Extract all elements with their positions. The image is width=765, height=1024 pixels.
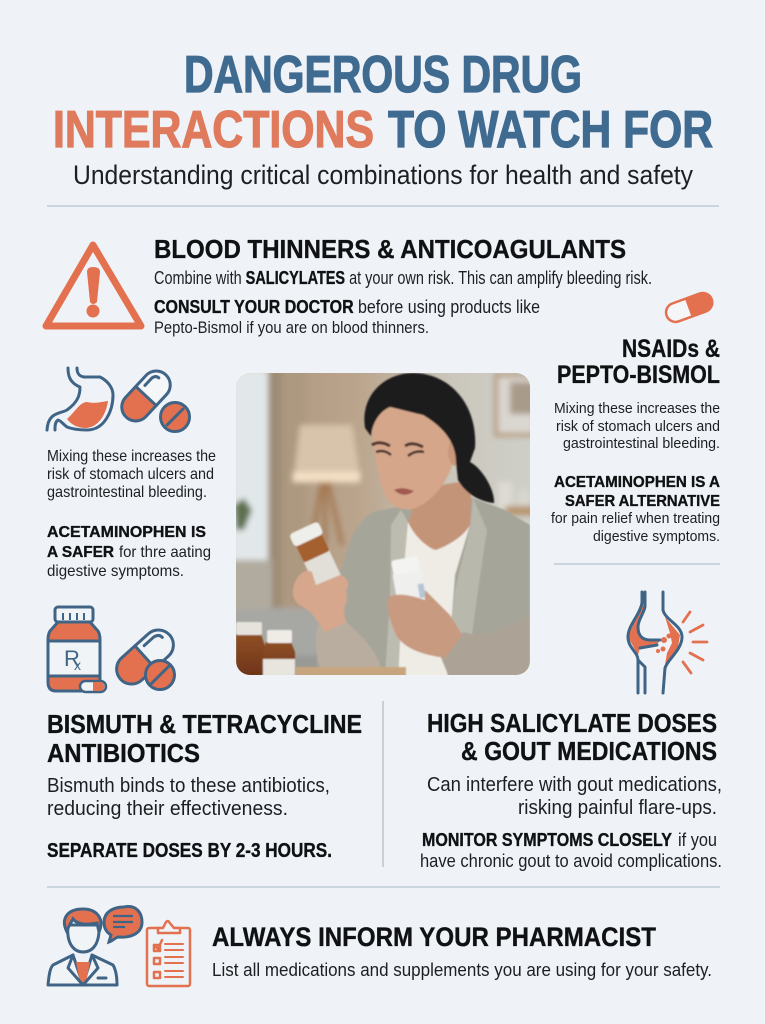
- heading: NSAIDs: NSAIDs &: [622, 335, 720, 363]
- icon: prescription bottle: x: [74, 657, 81, 673]
- icon: pill top right: [663, 289, 716, 326]
- panel: high salicylate doses: & GOUT MEDICATIONS: [461, 736, 717, 766]
- icon: warning triangle: [46, 245, 141, 326]
- text: right acetaminophen note: [551, 474, 720, 545]
- heading: bismuth: BISMUTH & TETRACYCLINE: [47, 709, 362, 739]
- text: left acetaminophen note: ACETAMINOPHEN IS: [47, 524, 206, 541]
- text: left acetaminophen note: [47, 524, 211, 580]
- heading: blood thinners: BLOOD THINNERS & ANTICOAGULANTS: [154, 234, 626, 264]
- icon: clipboard checklist: [147, 921, 190, 986]
- photo: woman reading medication bottles: [236, 373, 530, 675]
- text: left acetaminophen note: A SAFER: [47, 544, 114, 561]
- text: right stomach warning: Mixing these increases the: [554, 400, 720, 417]
- text: right acetaminophen note: ACETAMINOPHEN IS A: [554, 474, 720, 491]
- footer heading: ALWAYS INFORM YOUR PHARMACIST: [212, 922, 656, 952]
- text: monitor symptoms: MONITOR SYMPTOMS CLOSELY: [422, 830, 672, 850]
- icon: stomach: [47, 368, 113, 430]
- text: consult doctor: CONSULT YOUR DOCTOR before using products like: [154, 297, 540, 317]
- text: right acetaminophen note: SAFER ALTERNATIVE: [565, 493, 720, 510]
- panel: bismuth and tetracycline: reducing their effectiveness.: [47, 798, 288, 820]
- text: left stomach warning: risk of stomach ulcers and: [47, 466, 214, 483]
- panel: high salicylate doses: if you: [678, 830, 717, 850]
- text: left stomach warning: gastrointestinal bleeding.: [47, 484, 207, 501]
- text: salicylates warning: Combine with SALICYLATES at your own risk. This can amplify bleeding risk.: [154, 268, 652, 288]
- text: right stomach warning: risk of stomach ulcers and: [556, 418, 720, 435]
- icon: speech bubble: [104, 906, 142, 942]
- text: separate doses: SEPARATE DOSES BY 2-3 HOURS.: [47, 840, 332, 862]
- bottles on table: [236, 622, 295, 676]
- heading: NSAIDs: PEPTO-BISMOL: [557, 361, 720, 389]
- text: right acetaminophen note: digestive symptoms.: [593, 528, 720, 545]
- panel: high salicylate doses: [420, 708, 722, 871]
- icon: pharmacist: [48, 909, 117, 985]
- text: can interfere: Can interfere with gout medications,: [427, 774, 722, 796]
- text: left acetaminophen note: for thre aating: [119, 544, 211, 561]
- panel: blood thinners: [154, 234, 652, 337]
- icon: prescription bottle: R: [64, 646, 80, 671]
- panel: bismuth and tetracycline: [47, 709, 362, 862]
- icon: capsule and tablet bottom: [110, 624, 180, 690]
- woman figure: [289, 373, 530, 680]
- heading: salicylate: HIGH SALICYLATE DOSES: [427, 708, 717, 738]
- text: pepto note: Pepto-Bismol if you are on blood thinners.: [154, 318, 429, 337]
- footer text: List all medications and supplements you are using for your safety.: [212, 960, 712, 980]
- text: right acetaminophen note: for pain relief when treating: [551, 510, 720, 527]
- panel: high salicylate doses: risking painful flare-ups.: [518, 797, 717, 819]
- title: [53, 46, 713, 159]
- heading: NSAIDs: [557, 335, 720, 389]
- text: left stomach warning: Mixing these increases the: [47, 448, 216, 465]
- title: INTERACTIONS: [53, 101, 374, 159]
- subtitle: Understanding critical combinations for health and safety: [73, 160, 693, 190]
- photo background room: [236, 373, 530, 675]
- text: left acetaminophen note: digestive symptoms.: [47, 563, 184, 580]
- text: left stomach warning: [47, 448, 216, 501]
- icon: inflamed joint: [628, 592, 707, 693]
- icon: capsule and tablet: [116, 365, 190, 432]
- panel: high salicylate doses: have chronic gout to avoid complications.: [420, 851, 722, 871]
- text: right stomach warning: gastrointestinal bleeding.: [563, 435, 720, 452]
- text: right stomach warning: [554, 400, 720, 452]
- text: bismuth binds: Bismuth binds to these antibiotics,: [47, 775, 330, 797]
- icon: prescription bottle: [48, 607, 106, 692]
- title: DANGEROUS DRUG: [184, 46, 582, 104]
- panel: bismuth and tetracycline: ANTIBIOTICS: [47, 738, 200, 768]
